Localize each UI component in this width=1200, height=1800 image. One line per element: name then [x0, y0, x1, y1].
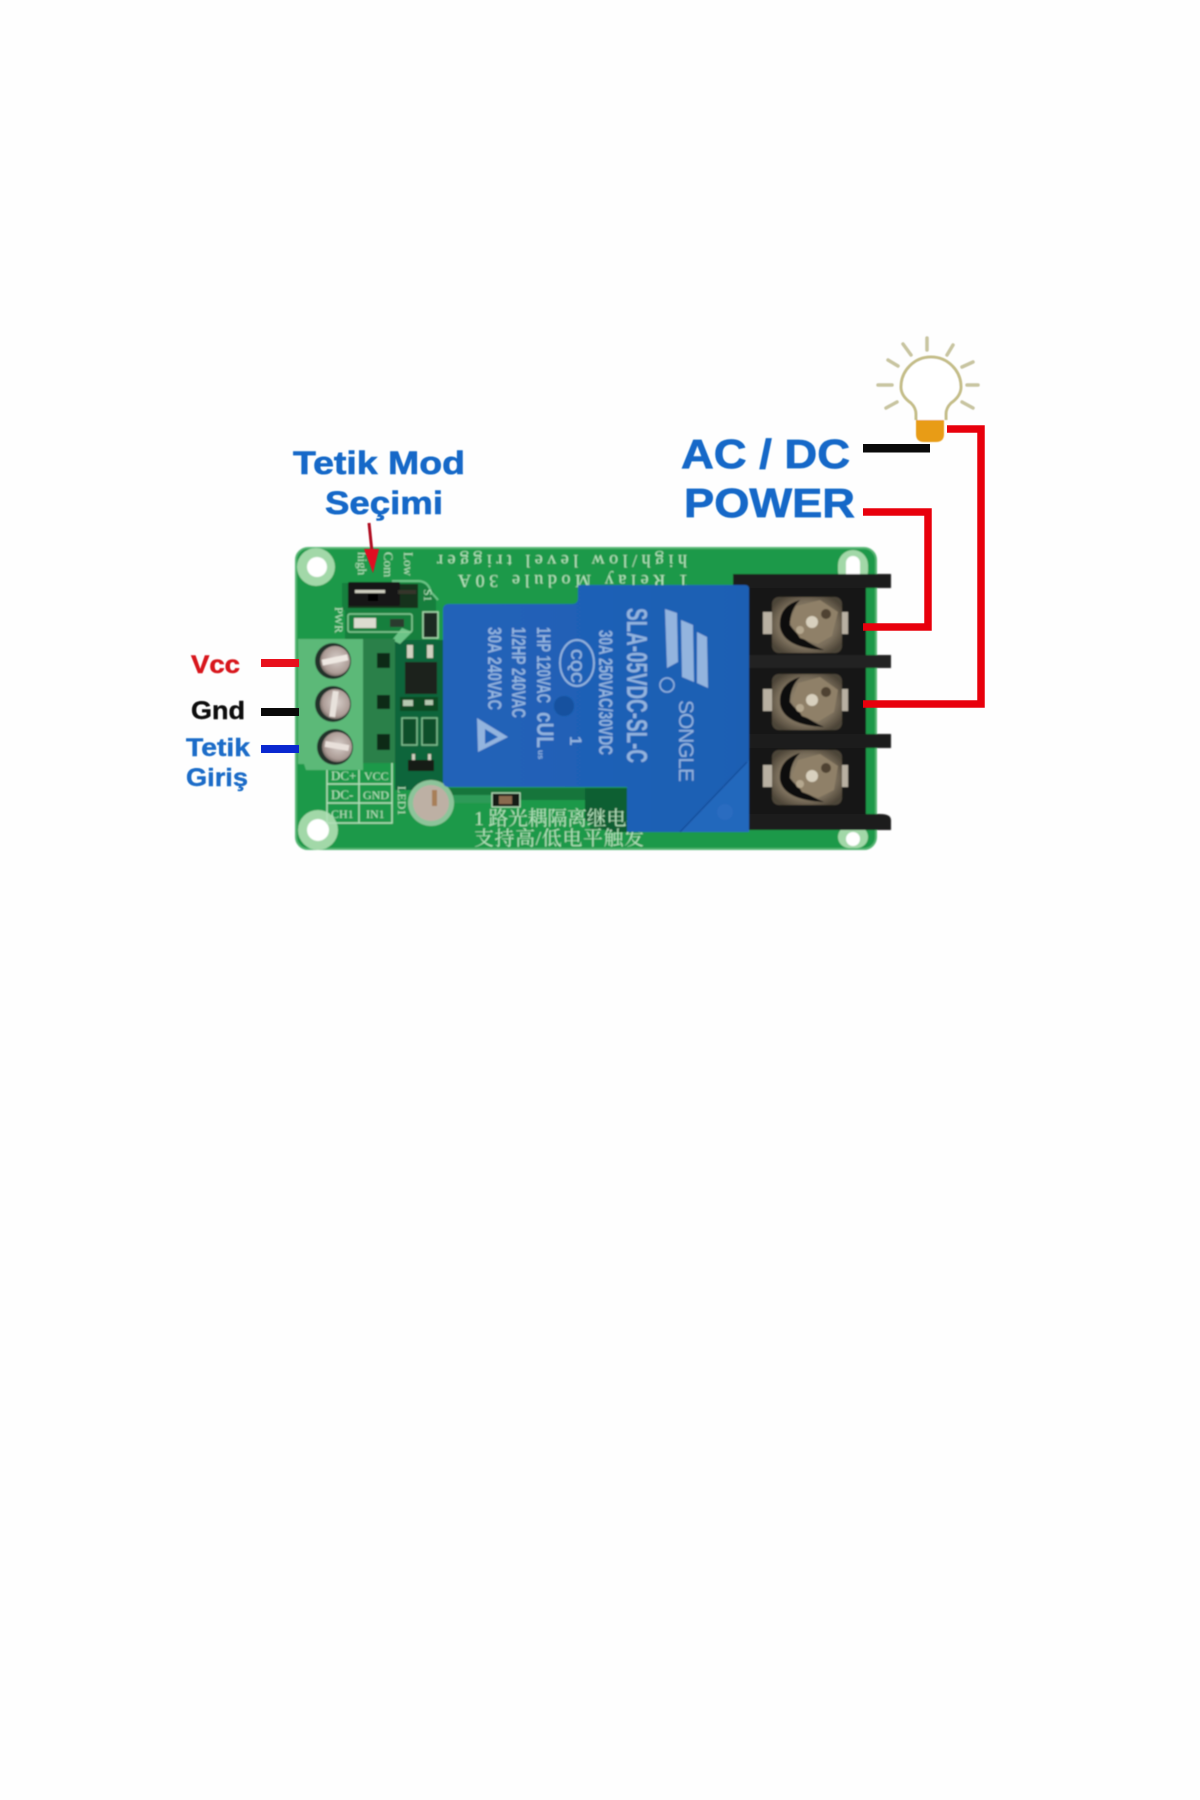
- relay markings: 1HP 120VAC: [532, 627, 553, 703]
- circuit board: [296, 548, 876, 849]
- pcb silkscreen top text: S1: [421, 589, 435, 602]
- pcb chinese text: [474, 807, 646, 850]
- terminal pin table: GND: [363, 788, 389, 802]
- pcb chinese text: 1 路光耦隔离继电器: [474, 807, 646, 830]
- heading: tetik mod secimi: Seçimi: [325, 485, 443, 521]
- pcb silkscreen top text: high: [355, 552, 370, 576]
- label: gnd: Gnd: [191, 697, 245, 725]
- wire: trigger input: [261, 745, 299, 753]
- jumper: [348, 582, 418, 608]
- wire: gnd: [261, 708, 299, 716]
- label: tetik giris: Giriş: [186, 764, 248, 792]
- wire: red bulb to terminal: [863, 429, 981, 704]
- green screw terminal: [298, 639, 395, 770]
- pcb silkscreen top text: [332, 551, 688, 633]
- pcb chinese text: 支持高/低电平触发: [474, 827, 644, 850]
- label: tetik giris: [186, 734, 250, 792]
- relay markings: SONGLE: [674, 700, 697, 782]
- label: ac dc power: POWER: [684, 480, 855, 526]
- wire: red power to terminal: [863, 512, 928, 627]
- icon: light bulb: [878, 338, 978, 442]
- pcb silkscreen top text: high/low level trigger: [437, 551, 687, 571]
- relay markings: 1/2HP 240VAC: [507, 627, 528, 718]
- relay markings: us: [536, 750, 545, 760]
- terminal pin table: IN1: [366, 807, 385, 821]
- label: tetik giris: Tetik: [186, 734, 250, 762]
- heading: tetik mod secimi: [293, 445, 465, 521]
- relay markings: 30A 250VAC/30VDC: [594, 630, 615, 755]
- label: ac dc power: AC / DC: [681, 431, 850, 477]
- label: ac dc power: [681, 431, 855, 526]
- relay markings: [477, 608, 733, 820]
- terminal pin table: DC-: [331, 787, 353, 802]
- terminal pin table: CH1: [331, 807, 354, 821]
- wire: black ac/dc to bulb: [863, 444, 930, 452]
- optocoupler and smd parts: [400, 645, 438, 771]
- pwr led: [348, 612, 438, 638]
- pcb silkscreen top text: Low: [401, 552, 416, 576]
- pcb silkscreen top text: PWR: [332, 607, 346, 633]
- relay markings: 1: [566, 736, 585, 745]
- relay markings: cUL: [531, 712, 558, 748]
- relay module photo: [296, 548, 891, 850]
- relay markings: CQC: [567, 649, 584, 683]
- relay markings: SLA-05VDC-SL-C: [620, 608, 652, 763]
- terminal pin table: DC+: [331, 768, 356, 783]
- pcb silkscreen top text: Com: [381, 552, 396, 577]
- blue relay: [443, 585, 749, 832]
- terminal pin table: LED1: [395, 786, 409, 815]
- status led: [408, 780, 520, 826]
- mounting holes: [297, 548, 868, 850]
- terminal pin table: VCC: [364, 769, 389, 783]
- black screw terminal block: [733, 574, 891, 830]
- arrow: jumper pointer: [364, 523, 379, 573]
- wire: vcc: [261, 659, 299, 667]
- heading: tetik mod secimi: Tetik Mod: [293, 445, 465, 481]
- pcb silkscreen top text: 1 Relay Module 30A: [458, 571, 688, 591]
- terminal pin table: [327, 763, 409, 823]
- relay markings: 30A 240VAC: [483, 627, 504, 710]
- label: vcc: Vcc: [191, 651, 240, 679]
